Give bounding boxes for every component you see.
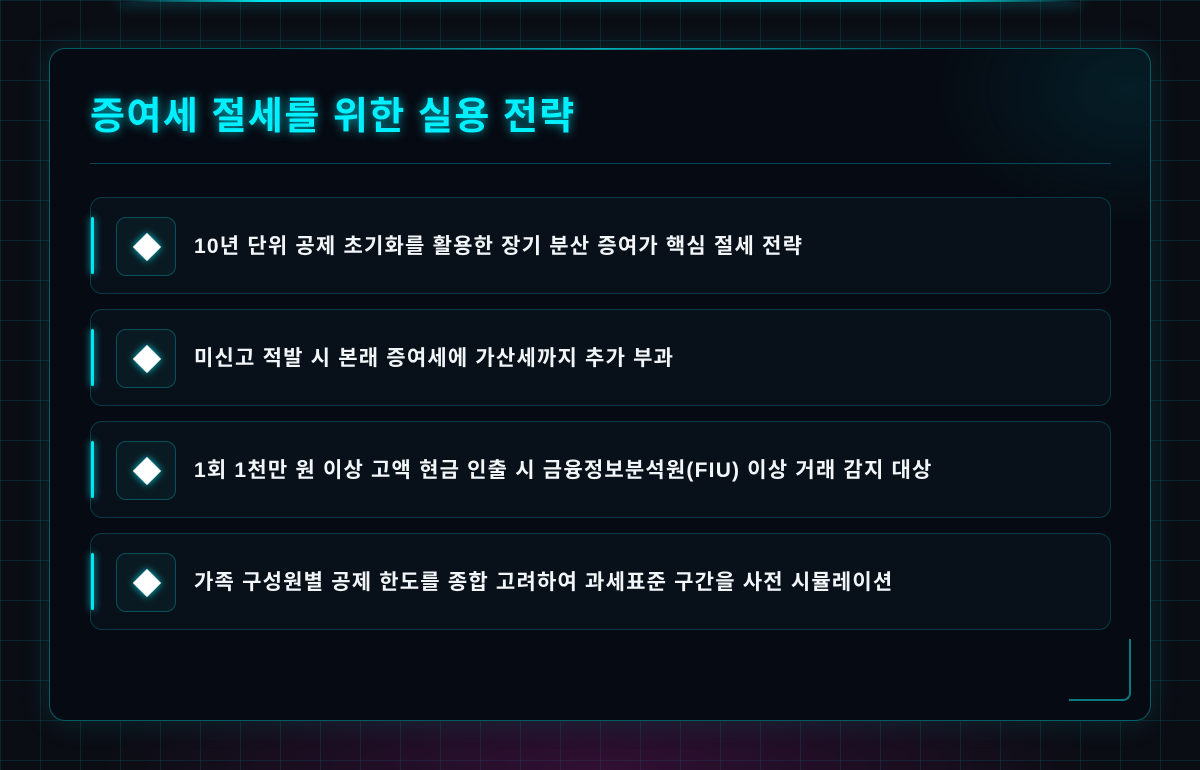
item 4 (90, 533, 1111, 630)
item 3 (90, 421, 1111, 518)
text 3: 1회 1천만 원 이상 고액 현금 인출 시 금융정보분석원(FIU) 이상 거래 감지 대상 (194, 459, 933, 482)
item 2 (90, 309, 1111, 406)
icon: diamond (116, 553, 176, 612)
corner bracket (1069, 639, 1131, 701)
icon: diamond (116, 329, 176, 388)
item 1 (90, 197, 1111, 294)
icon: diamond (116, 217, 176, 276)
icon: diamond (116, 441, 176, 500)
text 1: 10년 단위 공제 초기화를 활용한 장기 분산 증여가 핵심 절세 전략 (194, 235, 803, 258)
text 4: 가족 구성원별 공제 한도를 종합 고려하여 과세표준 구간을 사전 시뮬레이션 (194, 571, 893, 594)
title: 증여세 절세를 위한 실용 전략 (90, 96, 576, 138)
text 2: 미신고 적발 시 본래 증여세에 가산세까지 추가 부과 (194, 347, 674, 370)
